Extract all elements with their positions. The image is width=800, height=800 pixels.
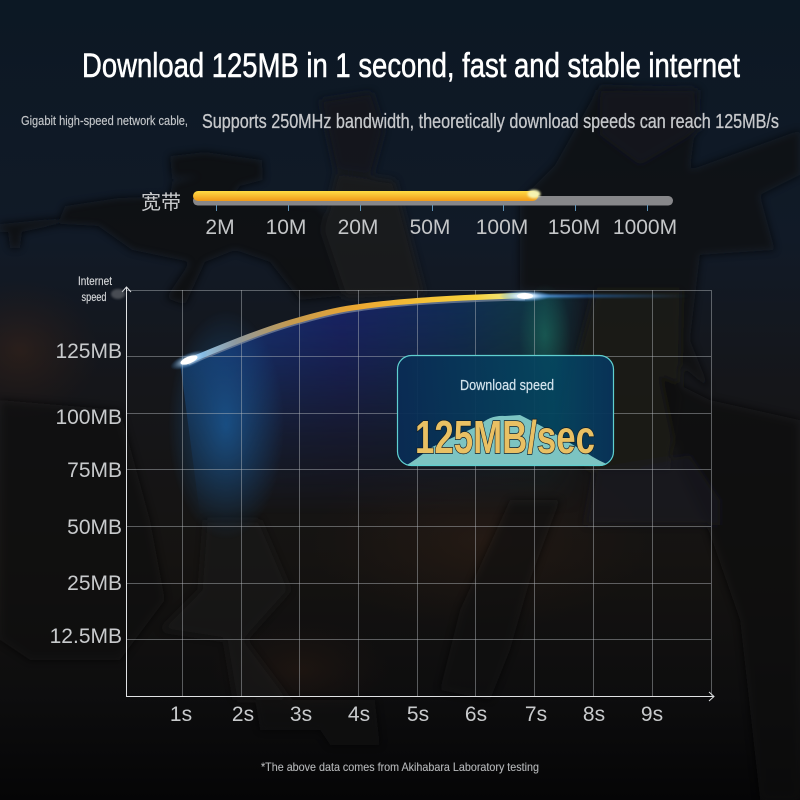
callout panel [398,356,614,466]
y axis title: Internet [78,276,113,288]
scale labels: 10M [266,216,306,239]
speed curve [188,296,525,363]
left soldier head [320,92,384,175]
x axis labels: 2s [232,703,254,726]
axes [122,287,714,701]
y axis title: speed [82,292,106,304]
y axis title [78,276,113,304]
running leg [440,500,560,700]
scale labels: 20M [338,216,378,239]
blue glow under curve start [168,310,284,540]
callout wave [405,415,612,466]
y axis labels: 75MB [67,459,122,482]
background: explosion glow [0,280,650,720]
x axis labels: 1s [170,703,192,726]
flare: start [168,346,210,374]
area under curve [180,296,576,492]
x axis labels: 8s [583,703,605,726]
scale labels: 50M [410,216,450,239]
y axis labels [50,340,122,648]
scale fill glow tip [528,190,540,198]
x axis labels: 3s [290,703,312,726]
subtitle: cable type: Gigabit high-speed network cable, [21,113,188,128]
scale labels: 150M [548,216,600,239]
left soldier rifle and arms [0,152,400,305]
grid lines [126,290,712,696]
right light trail [530,294,690,298]
y axis arrow glow [111,289,125,299]
scale labels: 2M [205,216,235,239]
y axis labels: 50MB [67,516,122,539]
chart [50,276,714,726]
scale track [193,196,673,206]
x axis labels: 7s [525,703,547,726]
right soldier vest [560,290,682,470]
x axis labels: 4s [348,703,370,726]
bandwidth scale [141,190,677,239]
kneeling leg [160,520,290,700]
callout border [398,356,614,466]
y axis labels: 12.5MB [50,625,122,648]
left mass [0,400,165,660]
callout value: 125MB/sec [415,411,595,463]
x axis labels [170,703,663,726]
scale labels [205,216,677,239]
x axis labels: 9s [641,703,663,726]
y axis labels: 100MB [55,406,122,429]
y axis labels: 125MB [55,340,122,363]
left soldier torso [322,172,425,298]
bandwidth label: 宽带 [141,191,181,214]
flare: end [499,290,551,302]
scale labels: 1000M [613,216,677,239]
y axis labels: 25MB [67,572,122,595]
x axis labels: 5s [407,703,429,726]
footnote: *The above data comes from Akihabara Laboratory testing [261,760,539,774]
scale ticks [216,205,648,211]
green glow under curve end [519,283,571,387]
right soldier lower [660,375,800,800]
scale fill [193,191,538,201]
scale labels: 100M [476,216,528,239]
callout label: Download speed [460,377,554,394]
callout [398,356,614,466]
x axis labels: 6s [465,703,487,726]
right soldier body [520,85,800,390]
